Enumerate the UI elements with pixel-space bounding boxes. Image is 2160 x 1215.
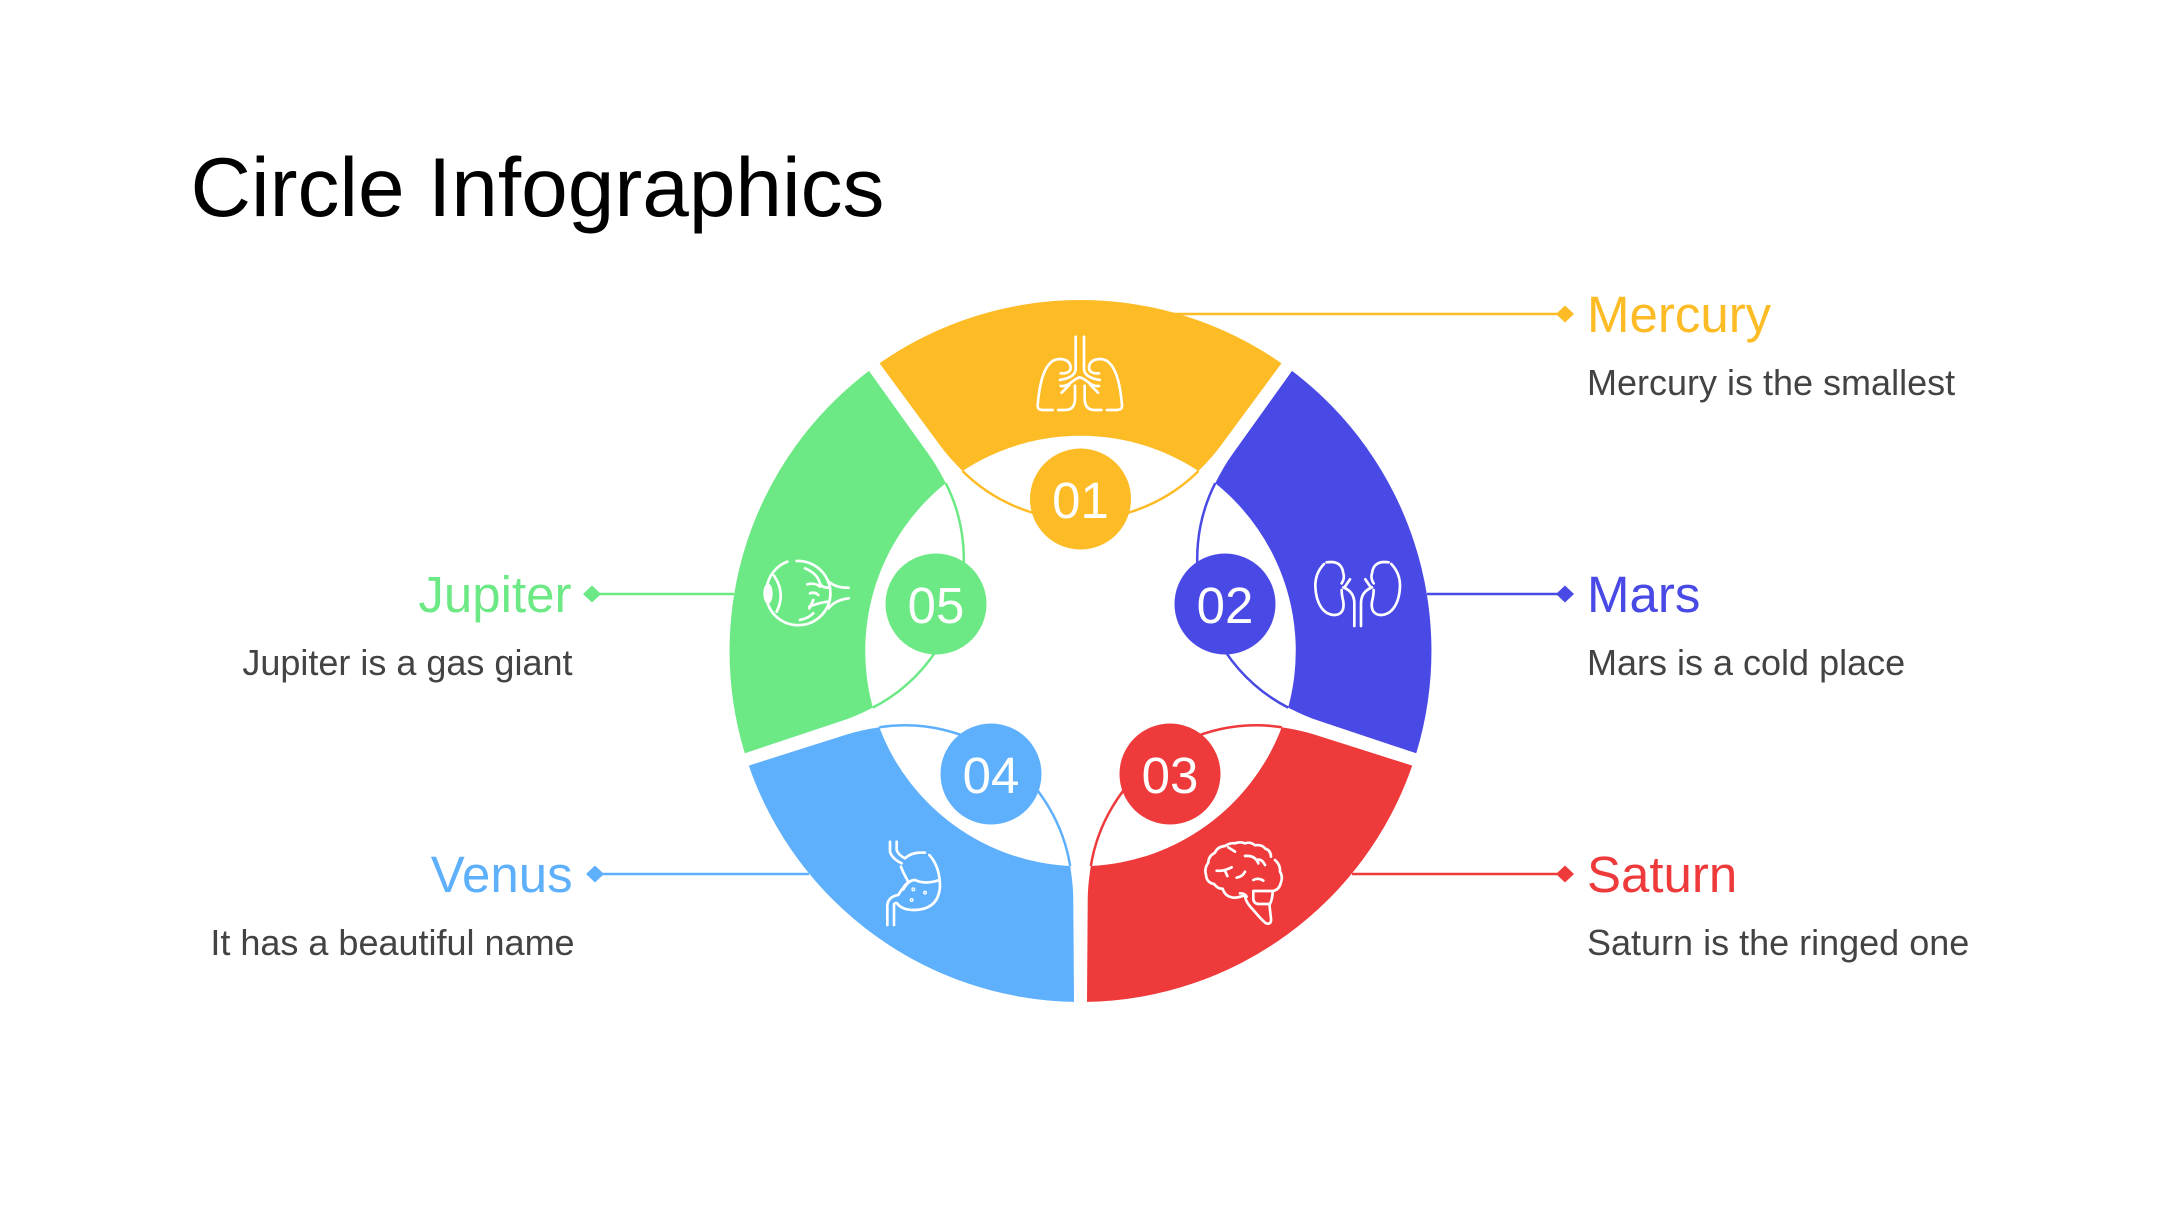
number badge: 02: 02 [1197, 577, 1253, 634]
label: Jupiter: Jupiter [418, 566, 572, 623]
thin arc: yellow [962, 471, 1198, 520]
ring segment: yellow [880, 300, 1282, 471]
panel: 03 Saturn [1024, 678, 1969, 1053]
number badge: 01: 01 [1052, 472, 1109, 529]
icon: eye [765, 561, 849, 625]
ring segment: green [685, 351, 971, 787]
description: Venus: It has a beautiful name [210, 922, 575, 963]
ring segment: indigo [1190, 351, 1476, 787]
number badge: 05 [886, 554, 986, 654]
thin arc: red [1062, 688, 1282, 866]
icon: stomach [887, 842, 940, 925]
connector: Jupiter [583, 586, 734, 602]
title: Circle Infographics [190, 140, 884, 234]
description: Mercury: Mercury is the smallest [1587, 362, 1955, 403]
thin arc: indigo [1169, 483, 1288, 723]
connector: Mercury [1172, 306, 1574, 322]
ring segment: red [1024, 678, 1449, 1053]
connector: Venus [586, 866, 809, 882]
panel: 02 Mars [1169, 351, 1905, 787]
thin arc: green [873, 483, 992, 723]
icon: lungs [1038, 337, 1122, 410]
ring segment: sky blue [712, 678, 1137, 1053]
label: Venus: Venus [431, 846, 573, 903]
label: Saturn: Saturn [1587, 846, 1737, 903]
panel: 01 Mercury [880, 286, 1955, 550]
number badge: 01 [1030, 448, 1131, 550]
panel: 05 Jupiter [242, 351, 992, 787]
icon: brain [1205, 842, 1282, 924]
number badge: 03: 03 [1142, 747, 1198, 804]
thin arc: sky blue [879, 688, 1099, 866]
number badge: 04 [940, 724, 1042, 824]
number badge: 04: 04 [963, 747, 1019, 804]
label: Mars: Mars [1587, 566, 1700, 623]
label: Mercury: Mercury [1587, 286, 1772, 343]
connector: Mars [1427, 586, 1574, 602]
number badge: 02 [1174, 554, 1276, 654]
panel: 04 Venus [210, 678, 1137, 1053]
description: Saturn: Saturn is the ringed one [1587, 922, 1969, 963]
number badge: 03 [1120, 724, 1220, 824]
icon: kidneys [1315, 562, 1400, 626]
description: Jupiter: Jupiter is a gas giant [242, 642, 572, 683]
connector: Saturn [1352, 866, 1574, 882]
number badge: 05: 05 [908, 577, 964, 634]
description: Mars: Mars is a cold place [1587, 642, 1905, 683]
